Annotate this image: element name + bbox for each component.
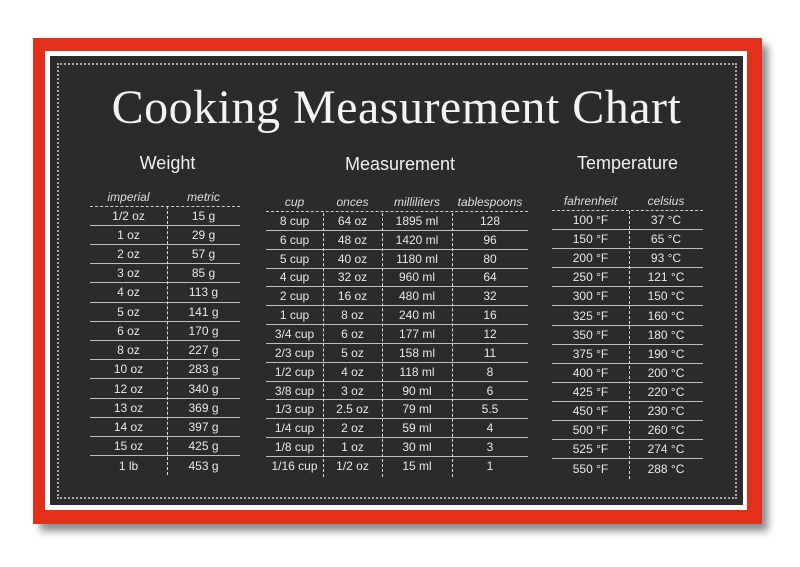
table: temperature: 375 °F [573, 347, 608, 361]
table: measurement: 240 ml [399, 308, 435, 322]
table: measurement: milliliters [394, 195, 440, 209]
table: weight: 29 g [192, 228, 215, 242]
table: measurement: 12 [483, 327, 497, 341]
table: temperature: 525 °F [573, 442, 608, 456]
table: weight: 141 g [188, 305, 219, 319]
table: measurement: 40 oz [338, 252, 367, 266]
title: Cooking Measurement Chart [112, 81, 681, 134]
table: measurement [266, 195, 528, 477]
table: weight: 170 g [188, 324, 219, 338]
table: measurement: 5 oz [341, 346, 364, 360]
table: measurement: tablespoons [458, 195, 522, 209]
table: measurement: 15 ml [402, 459, 432, 473]
table: measurement: 48 oz [338, 233, 367, 247]
table: temperature: 400 °F [573, 366, 608, 380]
table: weight: 227 g [188, 343, 219, 357]
frame shadow [40, 45, 768, 531]
table: measurement: 1 [487, 459, 493, 473]
table: measurement: 3/8 cup [275, 384, 314, 398]
table: measurement: 2/3 cup [275, 346, 314, 360]
table: measurement: 6 oz [341, 327, 364, 341]
table: temperature: 200 °F [573, 251, 608, 265]
table: measurement: 2 cup [280, 289, 309, 303]
table: weight: 453 g [188, 459, 219, 473]
table: measurement: 1895 ml [396, 214, 438, 228]
table: temperature: 274 °C [648, 442, 684, 456]
table: temperature: 350 °F [573, 328, 608, 342]
table: temperature: 500 °F [573, 423, 608, 437]
table: weight: 85 g [192, 266, 215, 280]
table: temperature [552, 194, 703, 479]
table: measurement: 90 ml [402, 384, 432, 398]
table: measurement: 11 [484, 346, 496, 360]
table: weight: 8 oz [117, 343, 140, 357]
table: temperature: 230 °C [648, 404, 684, 418]
table: measurement: 960 ml [399, 270, 435, 284]
table: weight [90, 190, 240, 475]
table: weight: 15 oz [114, 439, 143, 453]
table: measurement: 1420 ml [396, 233, 438, 247]
table: measurement: 32 [483, 289, 497, 303]
table: temperature: 550 °F [573, 462, 608, 476]
table: temperature: 150 °F [573, 232, 608, 246]
red frame [33, 38, 762, 524]
table: weight: 10 oz [114, 362, 143, 376]
table: measurement: 480 ml [399, 289, 435, 303]
table: measurement: 64 [483, 270, 497, 284]
table: temperature: celsius [648, 194, 684, 208]
table: measurement: 2 oz [341, 421, 364, 435]
table: weight: 5 oz [117, 305, 140, 319]
table: measurement: 1/8 cup [275, 440, 314, 454]
table: measurement: 4 cup [280, 270, 309, 284]
table: temperature: 160 °C [648, 309, 684, 323]
table: measurement: cup [285, 195, 304, 209]
table: weight: 57 g [192, 247, 215, 261]
table: weight: 14 oz [114, 420, 143, 434]
table: measurement: 128 [480, 214, 500, 228]
table: measurement: 1180 ml [396, 252, 438, 266]
table: measurement: 3 oz [341, 384, 364, 398]
table: temperature: 180 °C [648, 328, 684, 342]
table: temperature: 93 °C [651, 251, 681, 265]
table: measurement: 96 [483, 233, 497, 247]
table: measurement: 1/2 oz [336, 459, 369, 473]
table: temperature: 260 °C [648, 423, 684, 437]
table: weight: imperial [107, 190, 150, 204]
table: measurement: 1 oz [341, 440, 364, 454]
table: weight: metric [187, 190, 220, 204]
table: measurement: 1/3 cup [275, 402, 314, 416]
table: weight: 4 oz [117, 285, 140, 299]
table: temperature: 37 °C [651, 213, 681, 227]
table: weight: 1 lb [119, 459, 138, 473]
chalkboard [50, 56, 743, 505]
table: weight: 12 oz [114, 382, 143, 396]
heading: temperature: Temperature [577, 153, 678, 173]
table: measurement: 1/16 cup [271, 459, 318, 473]
table: weight: 6 oz [117, 324, 140, 338]
table: temperature: 100 °F [573, 213, 608, 227]
table: temperature: 220 °C [648, 385, 684, 399]
table: measurement: 6 [487, 384, 493, 398]
table: weight: 1 oz [117, 228, 140, 242]
table: measurement: 16 [483, 308, 497, 322]
table: temperature: fahrenheit [564, 194, 617, 208]
table: measurement: 6 cup [280, 233, 309, 247]
table: measurement: 118 ml [399, 365, 435, 379]
table: measurement: 4 [487, 421, 493, 435]
table: measurement: 158 ml [399, 346, 435, 360]
table: weight: 13 oz [114, 401, 143, 415]
heading: measurement: Measurement [345, 154, 455, 174]
table: measurement: 3 [487, 440, 493, 454]
table: measurement: 79 ml [402, 402, 432, 416]
table: temperature: 121 °C [648, 270, 684, 284]
table: measurement: 1 cup [280, 308, 309, 322]
table: temperature: 288 °C [648, 462, 684, 476]
table: temperature: 325 °F [573, 309, 608, 323]
table: measurement: 80 [483, 252, 497, 266]
table: measurement: 8 oz [341, 308, 364, 322]
heading: weight: Weight [140, 153, 195, 173]
table: measurement: 1/4 cup [275, 421, 314, 435]
table: weight: 283 g [188, 362, 219, 376]
table: temperature: 200 °C [648, 366, 684, 380]
table: temperature: 450 °F [573, 404, 608, 418]
table: measurement: 2.5 oz [336, 402, 369, 416]
table: weight: 15 g [192, 209, 215, 223]
table: weight: 1/2 oz [112, 209, 145, 223]
table: weight: 340 g [188, 382, 219, 396]
table: measurement: 30 ml [402, 440, 432, 454]
table: temperature: 250 °F [573, 270, 608, 284]
table: weight: 113 g [189, 285, 218, 299]
table: measurement: 5.5 [482, 402, 498, 416]
table: weight: 397 g [188, 420, 219, 434]
table: temperature: 150 °C [648, 289, 684, 303]
table: measurement: 177 ml [399, 327, 435, 341]
table: measurement: 32 oz [338, 270, 367, 284]
table: weight: 2 oz [117, 247, 140, 261]
table: temperature: 425 °F [573, 385, 608, 399]
table: measurement: 16 oz [338, 289, 367, 303]
table: measurement: 64 oz [338, 214, 367, 228]
table: measurement: onces [336, 195, 369, 209]
table: measurement: 59 ml [402, 421, 432, 435]
table: weight: 425 g [188, 439, 219, 453]
table: measurement: 1/2 cup [275, 365, 314, 379]
table: measurement: 4 oz [341, 365, 364, 379]
table: measurement: 8 cup [280, 214, 309, 228]
table: weight: 3 oz [117, 266, 140, 280]
table: measurement: 5 cup [280, 252, 309, 266]
table: temperature: 300 °F [573, 289, 608, 303]
white inner border [45, 51, 747, 510]
table: measurement: 8 [487, 365, 493, 379]
table: weight: 369 g [188, 401, 219, 415]
table: temperature: 65 °C [651, 232, 681, 246]
table: measurement: 3/4 cup [275, 327, 314, 341]
table: temperature: 190 °C [648, 347, 684, 361]
